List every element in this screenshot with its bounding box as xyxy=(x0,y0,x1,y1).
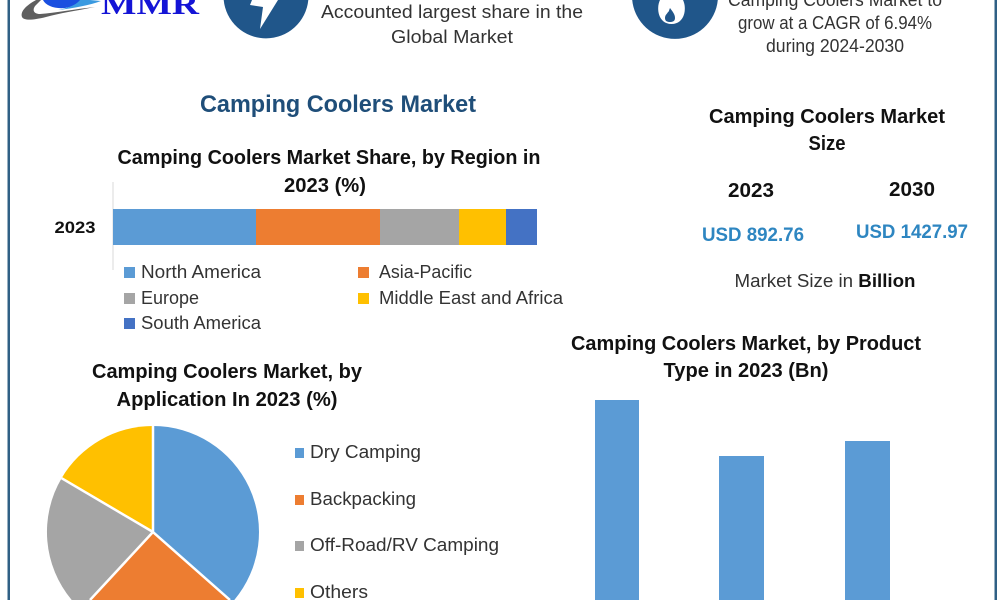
heading: product type xyxy=(571,333,921,382)
callout: CAGR xyxy=(728,0,942,56)
heading: application: Camping Coolers Market, by xyxy=(92,361,363,383)
pie chart xyxy=(47,426,259,600)
icon: flame xyxy=(632,0,718,39)
heading: region share: Camping Coolers Market Share, by Region in xyxy=(118,147,540,169)
heading: market size xyxy=(709,106,945,155)
year 2030: 2030 xyxy=(889,179,935,201)
panel: application pie xyxy=(47,361,499,600)
legend: regions xyxy=(124,262,564,333)
heading: product type: Camping Coolers Market, by Product xyxy=(571,333,921,355)
value 2030: USD 1427.97 xyxy=(856,222,968,243)
callout: CAGR: during 2024-2030 xyxy=(766,36,904,56)
logo: MMR xyxy=(22,0,199,21)
callout: largest share: Accounted largest share in the xyxy=(321,2,583,22)
heading: application xyxy=(92,361,363,411)
legend: applications: Backpacking xyxy=(310,489,416,509)
value 2023: USD 892.76 xyxy=(702,225,804,246)
year 2023: 2023 xyxy=(728,180,774,202)
callout: CAGR: grow at a CAGR of 6.94% xyxy=(738,13,932,33)
axis label: 2023: 2023 xyxy=(54,218,96,237)
legend: regions: Middle East and Africa xyxy=(379,288,564,308)
panel: region share chart xyxy=(54,147,564,333)
heading: market size: Size xyxy=(808,133,846,155)
heading: application: Application In 2023 (%) xyxy=(116,389,338,411)
legend: regions: North America xyxy=(141,262,262,282)
note: billion: Market Size in Billion xyxy=(734,271,916,291)
legend: regions: South America xyxy=(141,313,262,333)
panel: product type bars xyxy=(571,333,921,600)
legend: applications xyxy=(295,442,499,600)
heading: region share xyxy=(118,147,540,197)
legend: regions: Europe xyxy=(141,288,199,308)
heading: region share: 2023 (%) xyxy=(284,175,366,197)
callout: largest share xyxy=(321,2,583,47)
panel: market size xyxy=(702,106,968,291)
legend: regions: Asia-Pacific xyxy=(379,262,472,282)
stacked bar xyxy=(113,209,537,245)
callout: largest share: Global Market xyxy=(391,27,513,47)
icon: lightning bolt xyxy=(224,0,308,38)
bar chart xyxy=(595,400,890,600)
legend: applications: Off-Road/RV Camping xyxy=(310,535,499,555)
heading: market size: Camping Coolers Market xyxy=(709,106,945,128)
heading: product type: Type in 2023 (Bn) xyxy=(664,360,828,382)
legend: applications: Dry Camping xyxy=(310,442,421,462)
title: Camping Coolers Market xyxy=(200,91,476,118)
